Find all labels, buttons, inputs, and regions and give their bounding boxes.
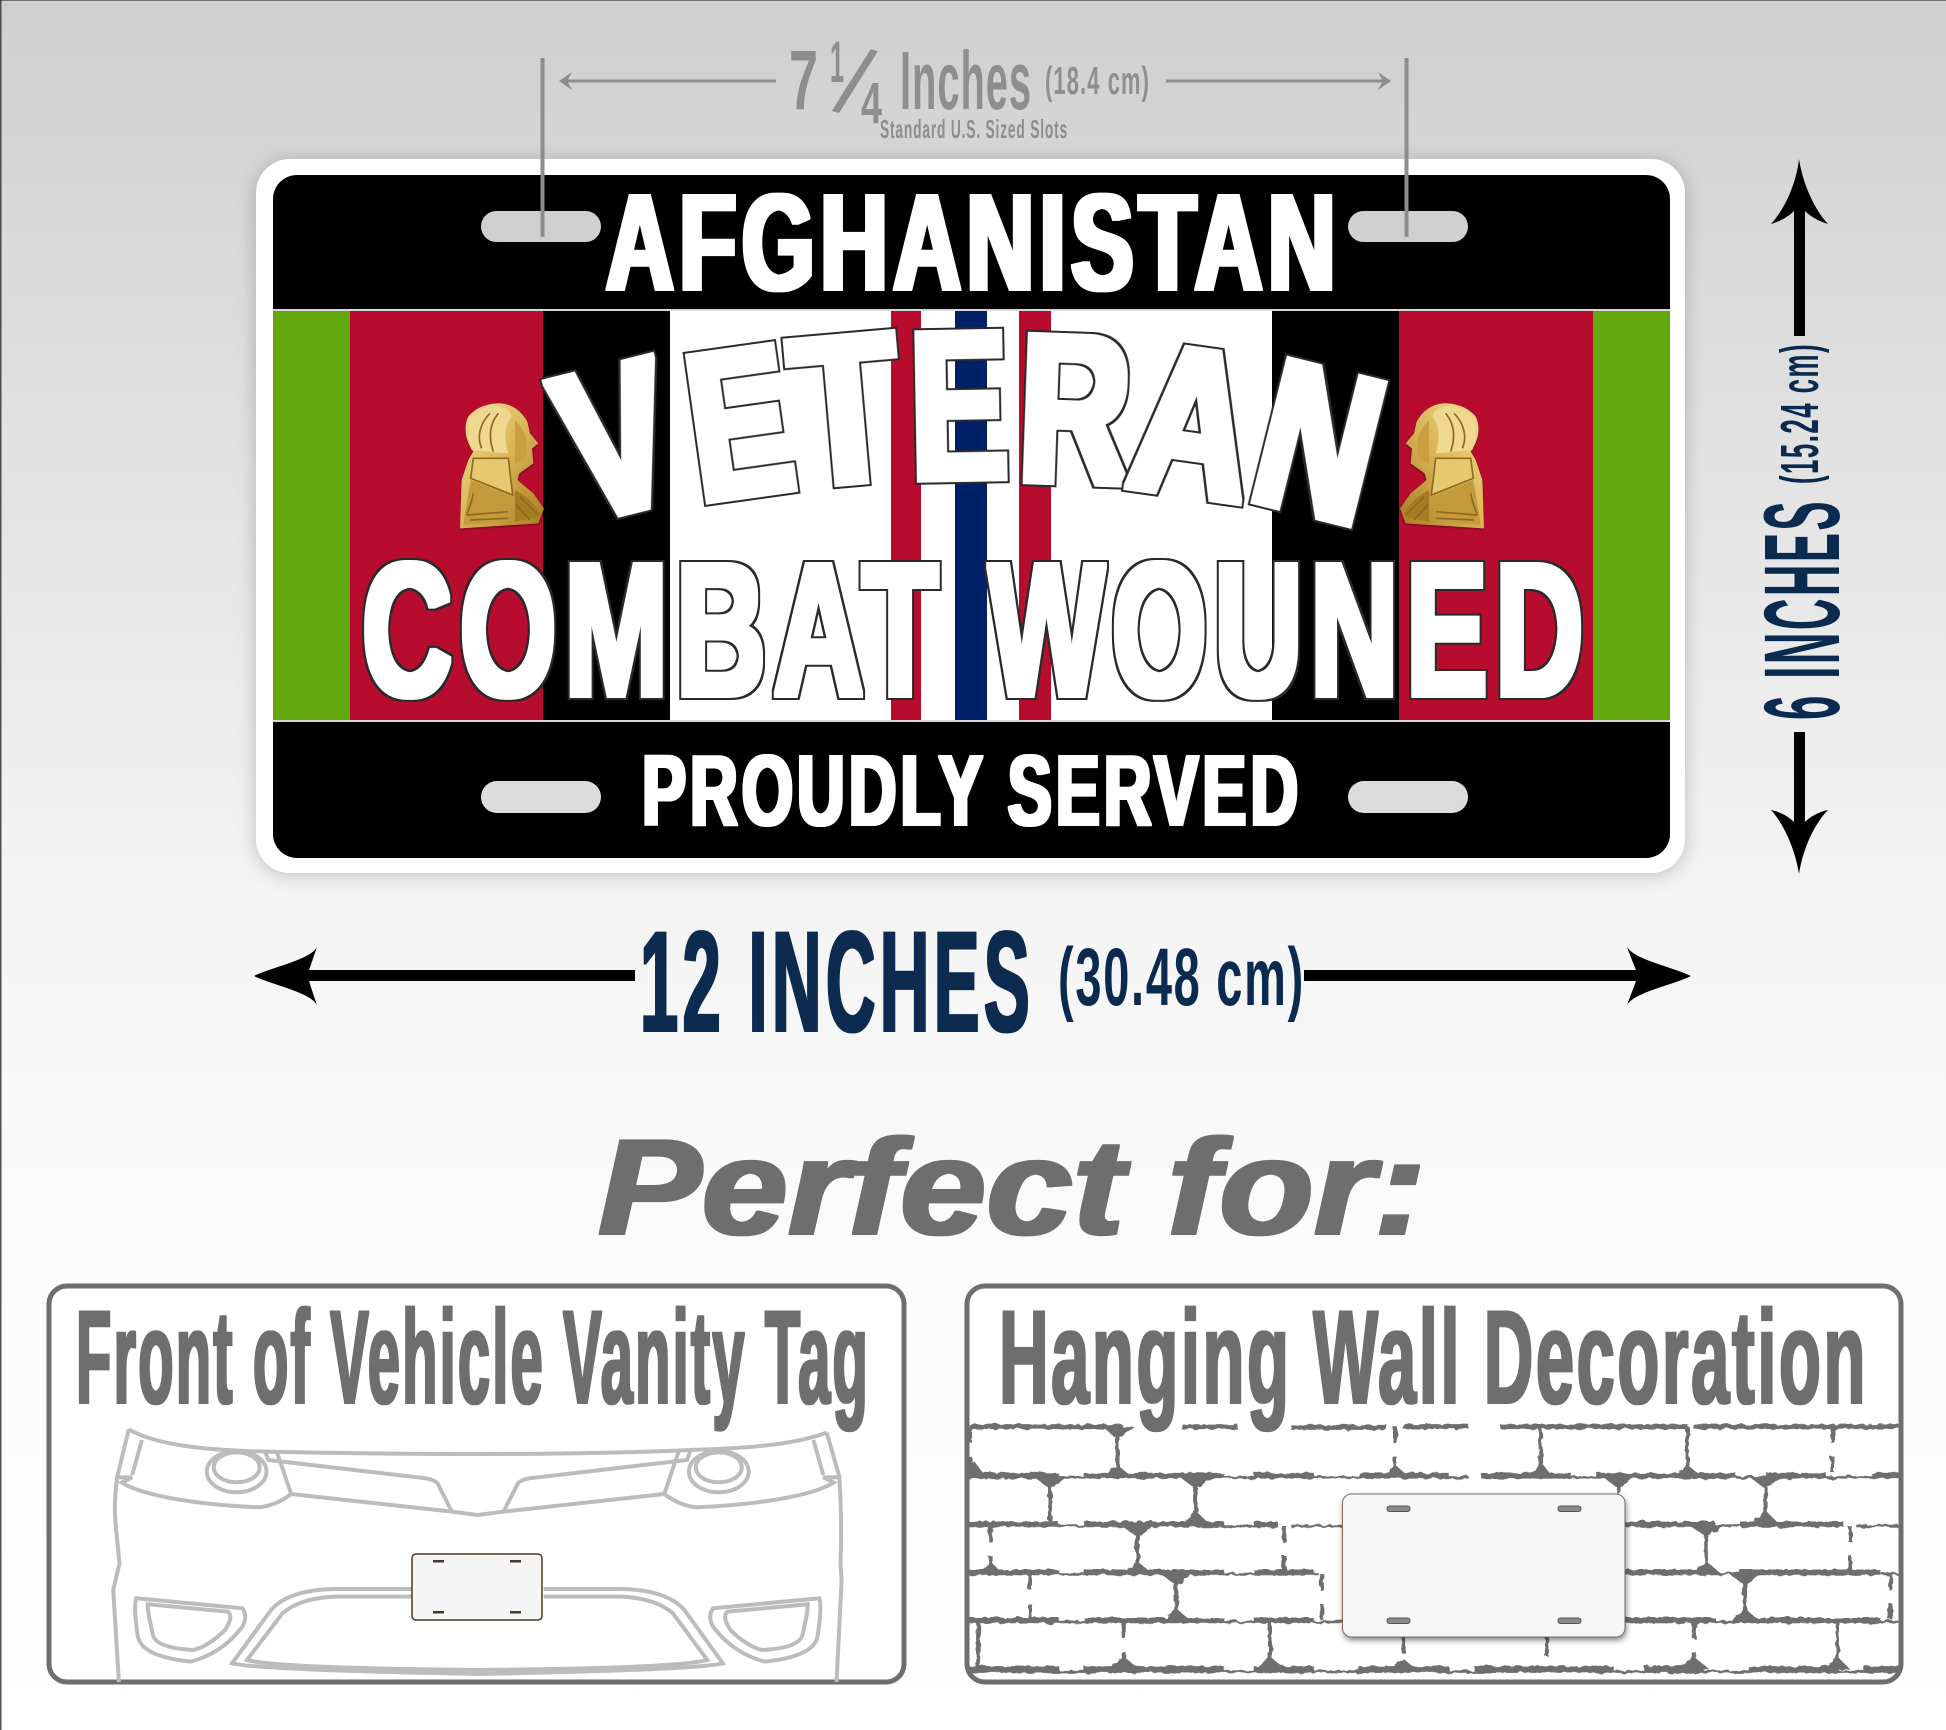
heading: arched VETERAN: E — [674, 299, 805, 548]
heading: COMBAT WOUNED: COMBAT — [362, 525, 946, 736]
label: 7 1/4 Inches — [789, 28, 1150, 138]
arrow: up — [1771, 159, 1828, 336]
mini plate on car — [412, 1554, 542, 1620]
arrow: down — [1771, 732, 1828, 874]
mounting slots — [481, 211, 1468, 813]
panel frame right — [967, 1286, 1901, 1682]
label: 7 1/4 Inches: 1 — [830, 30, 844, 95]
label: 7 1/4 Inches: (18.4 cm) — [1045, 60, 1150, 103]
arrow: slot spacing right — [1166, 72, 1391, 90]
label: 7 1/4 Inches: Inches — [900, 34, 1032, 127]
heading: AFGHANISTAN: AFGHANISTAN — [606, 166, 1341, 320]
panel: hanging wall decoration — [961, 1284, 1901, 1682]
heading: COMBAT WOUNED: WOUNED — [989, 525, 1591, 736]
heading: arched VETERAN: T — [782, 287, 909, 533]
arrow: left — [254, 947, 635, 1005]
heading: arched VETERAN: A — [1118, 297, 1268, 549]
label: 30.48 cm: (30.48 cm) — [1058, 932, 1305, 1023]
icon: brick wall — [961, 1427, 1900, 1672]
arrow: slot spacing left — [559, 72, 776, 90]
slot spacing dimension — [540, 28, 1408, 237]
height dimension: 6 INCHES — [1741, 499, 1862, 720]
panel frame left — [49, 1286, 904, 1682]
label: 7 1/4 Inches: 4 — [861, 71, 882, 136]
panel: front of vehicle — [49, 1284, 904, 1683]
heading: arched VETERAN — [535, 286, 1404, 572]
blank plate on wall — [1342, 1494, 1625, 1637]
width dimension: 12 INCHES — [640, 903, 1034, 1062]
infographic canvas: Front of Vehicle Vanity Tag — [76, 1284, 870, 1432]
license plate — [256, 159, 1685, 873]
heading: arched VETERAN: R — [1016, 289, 1134, 531]
width dimension — [254, 903, 1691, 1062]
heading: Perfect for: Perfect for: — [598, 1111, 1426, 1263]
height dimension: (15.24 cm) — [1770, 343, 1830, 484]
plate black field — [273, 175, 1670, 858]
heading: arched VETERAN: N — [1234, 313, 1404, 572]
arrow: right — [1304, 947, 1691, 1005]
slot guide lines — [540, 58, 1408, 237]
heading: arched VETERAN: E — [909, 286, 1009, 526]
heading: arched VETERAN: V — [535, 311, 697, 569]
label: 7 1/4 Inches: / — [826, 28, 883, 138]
heading: PROUDLY SERVED: PROUDLY SERVED — [642, 735, 1302, 847]
icon: car front outline — [113, 1429, 842, 1683]
label: standard slots: Standard U.S. Sized Slots — [880, 114, 1068, 144]
plate white base — [256, 159, 1685, 873]
ribbon stripes — [273, 309, 1670, 722]
icon: gold bust right — [1400, 403, 1484, 528]
label: 7 1/4 Inches: 7 — [789, 33, 818, 127]
icon: gold bust left — [460, 403, 544, 528]
